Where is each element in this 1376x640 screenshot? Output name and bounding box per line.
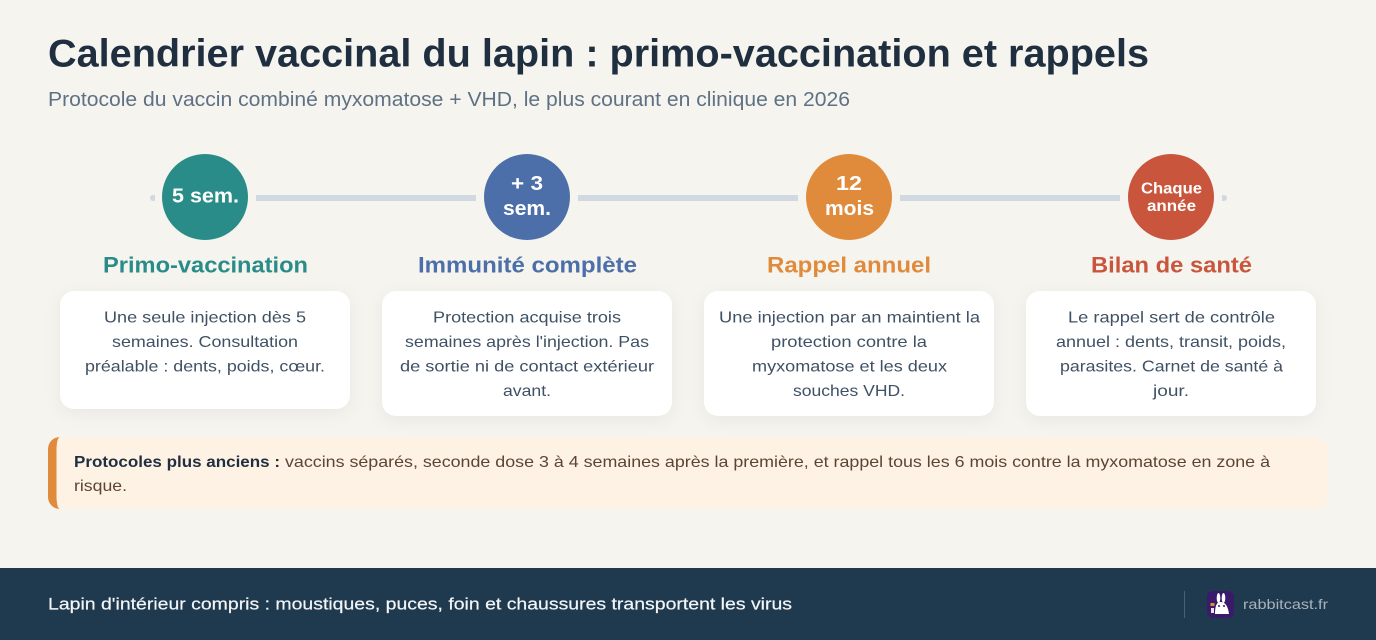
card: bilan de santé: annuel : dents, transit, poids, [1056, 334, 1286, 351]
badge: plus 3 semaines: sem. [503, 198, 551, 220]
footer bar [0, 568, 1376, 640]
card: bilan de santé: parasites. Carnet de santé à [1060, 358, 1283, 376]
callout: protocoles plus anciens: Protocoles plus anciens : [74, 454, 280, 471]
step 2: immunité complète [382, 154, 672, 416]
card: rappel annuel: Une injection par an maintient la [719, 310, 980, 326]
card: bilan de santé: jour. [1152, 383, 1189, 400]
card: rappel annuel [704, 291, 994, 416]
badge: 12 mois: mois [825, 198, 874, 220]
step 4: bilan de santé [1026, 154, 1316, 416]
card: immunité complète: semaines après l'injection. Pas [405, 334, 649, 351]
card: immunité complète: de sortie ni de contact extérieur [400, 358, 655, 376]
badge: chaque année [1128, 154, 1214, 240]
heading: immunité complète: Immunité complète [418, 252, 637, 278]
card: primo-vaccination [60, 291, 350, 409]
card: primo-vaccination: semaines. Consultation [112, 334, 298, 351]
card: rappel annuel: protection contre la [771, 334, 927, 351]
card: bilan de santé: Le rappel sert de contrôle [1068, 310, 1275, 326]
heading: primo-vaccination: Primo-vaccination [103, 252, 308, 278]
badge: chaque année: Chaque [1141, 180, 1202, 198]
callout: protocoles plus anciens: vaccins séparés, seconde dose 3 à 4 semaines après la première, et rappel tous les 6 mois contre la myxomatose en zone à [285, 454, 1270, 471]
timeline connector [150, 195, 1227, 201]
card: immunité complète: Protection acquise trois [433, 310, 621, 326]
heading: bilan de santé: Bilan de santé [1091, 252, 1252, 278]
step 1: primo-vaccination [60, 154, 350, 409]
step 3: rappel annuel [704, 154, 994, 416]
brand name: rabbitcast.fr [1243, 596, 1328, 612]
card: bilan de santé [1026, 291, 1316, 416]
badge: 12 mois [806, 154, 892, 240]
title: Calendrier vaccinal du lapin : primo-vaccination et rappels [48, 32, 1149, 76]
icon: rabbit logo [1207, 591, 1234, 618]
card: rappel annuel: myxomatose et les deux [752, 358, 947, 376]
card: primo-vaccination: préalable : dents, poids, cœur. [85, 358, 325, 376]
card: immunité complète [382, 291, 672, 416]
callout: protocoles plus anciens [48, 437, 1328, 509]
badge: 5 semaines: 5 sem. [172, 186, 239, 208]
footer message: Lapin d'intérieur compris : moustiques, puces, foin et chaussures transportent les virus [48, 594, 792, 614]
badge: 12 mois: 12 [836, 173, 862, 195]
card: rappel annuel: souches VHD. [793, 383, 905, 400]
callout: protocoles plus anciens: risque. [74, 478, 127, 495]
card: immunité complète: avant. [503, 383, 551, 400]
badge: plus 3 semaines: + 3 [511, 173, 543, 195]
card: primo-vaccination: Une seule injection dès 5 [104, 310, 306, 326]
subtitle: Protocole du vaccin combiné myxomatose + VHD, le plus courant en clinique en 2026 [48, 89, 850, 111]
badge: 5 semaines [162, 154, 248, 240]
heading: rappel annuel: Rappel annuel [767, 252, 931, 278]
badge: plus 3 semaines [484, 154, 570, 240]
badge: chaque année: année [1147, 198, 1196, 215]
